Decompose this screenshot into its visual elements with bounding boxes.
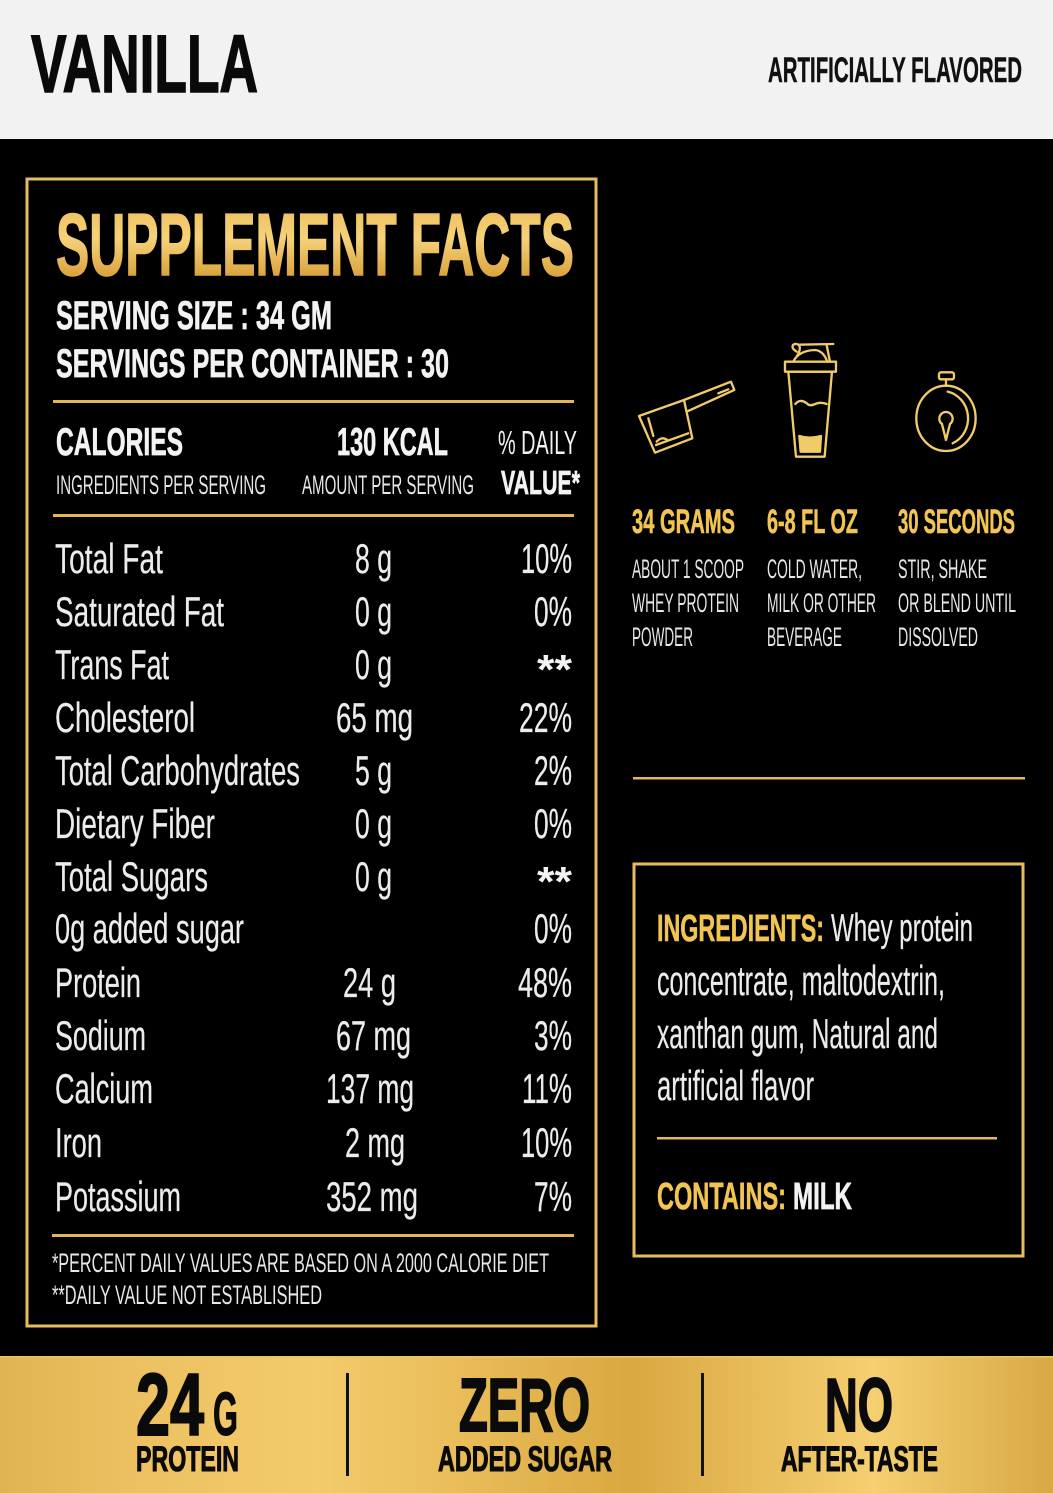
step: liquid amount <box>767 503 876 652</box>
text: serving information: SERVINGS PER CONTAINER : 30 <box>56 342 449 386</box>
footnotes: *PERCENT DAILY VALUES ARE BASED ON A 2000 CALORIE DIET <box>52 1248 549 1278</box>
row: total sugars: 0 g <box>355 853 392 900</box>
row: calcium: Calcium <box>55 1065 153 1112</box>
table header: VALUE* <box>501 464 580 501</box>
step: liquid amount: BEVERAGE <box>767 622 842 652</box>
row: added sugar <box>55 905 572 952</box>
icon: measuring scoop <box>639 382 734 453</box>
row: trans fat: Trans Fat <box>55 641 169 688</box>
claim: zero added sugar: ADDED SUGAR <box>438 1440 612 1479</box>
row: cholesterol: Cholesterol <box>55 694 195 741</box>
row: saturated fat: 0 g <box>355 588 392 635</box>
icon: stopwatch <box>916 372 976 451</box>
text: serving information <box>56 294 449 386</box>
footnotes: **DAILY VALUE NOT ESTABLISHED <box>52 1280 322 1310</box>
step: liquid amount: MILK OR OTHER <box>767 588 876 618</box>
row: sodium: Sodium <box>55 1012 146 1059</box>
row: trans fat: ** <box>537 646 573 693</box>
row: total fat <box>55 535 572 582</box>
step: scoop amount: 34 GRAMS <box>632 503 735 541</box>
row: sodium: 67 mg <box>336 1012 411 1059</box>
row: cholesterol: 22% <box>519 694 572 741</box>
step: liquid amount: COLD WATER, <box>767 554 862 584</box>
step: scoop amount <box>632 503 744 652</box>
row: saturated fat: 0% <box>534 588 572 635</box>
top header band <box>0 0 1053 139</box>
step: mixing time <box>898 503 1016 652</box>
row: dietary fiber <box>55 800 572 847</box>
panel: ingredients <box>634 864 1023 1256</box>
row: potassium: Potassium <box>55 1173 181 1220</box>
heading: supplement facts: SUPPLEMENT FACTS <box>56 195 574 294</box>
row: cholesterol <box>55 694 572 741</box>
row: calcium: 11% <box>522 1065 572 1112</box>
claim: zero added sugar: ZERO <box>459 1363 590 1447</box>
row: total fat: Total Fat <box>55 535 163 582</box>
row: protein: Protein <box>55 959 141 1006</box>
claim: 24g protein: 24 <box>136 1355 204 1454</box>
row: added sugar: 0% <box>534 905 572 952</box>
step: liquid amount: 6-8 FL OZ <box>767 503 858 541</box>
row: iron: Iron <box>55 1119 102 1166</box>
row: potassium: 7% <box>534 1173 572 1220</box>
icon: shaker bottle <box>785 344 836 457</box>
row: protein <box>55 959 572 1006</box>
row: total carbohydrates: 2% <box>534 747 572 794</box>
row: saturated fat: Saturated Fat <box>55 588 224 635</box>
row: total sugars <box>55 853 573 905</box>
table header: 130 KCAL <box>337 421 448 464</box>
row: calcium <box>55 1065 572 1112</box>
table header: AMOUNT PER SERVING <box>302 470 474 500</box>
claim: 24g protein: PROTEIN <box>136 1440 239 1479</box>
row: total carbohydrates: Total Carbohydrates <box>55 747 300 794</box>
row: dietary fiber: 0 g <box>355 800 392 847</box>
row: trans fat <box>55 641 573 693</box>
row: dietary fiber: 0% <box>534 800 572 847</box>
row: trans fat: 0 g <box>355 641 392 688</box>
table header: INGREDIENTS PER SERVING <box>56 470 266 500</box>
step: scoop amount: ABOUT 1 SCOOP <box>632 554 744 584</box>
row: calcium: 137 mg <box>326 1065 414 1112</box>
claim: 24g protein: G <box>213 1380 238 1448</box>
text: ingredients list: artificial flavor <box>657 1062 814 1109</box>
text: ingredients list: INGREDIENTS: <box>657 908 824 950</box>
row: saturated fat <box>55 588 572 635</box>
bottom gold band <box>0 1355 1053 1493</box>
claim: no after-taste <box>781 1363 938 1479</box>
row: protein: 24 g <box>343 959 396 1006</box>
row: total sugars: ** <box>537 858 573 905</box>
row: sodium: 3% <box>534 1012 572 1059</box>
row: iron <box>55 1119 572 1166</box>
table header: % DAILY <box>498 424 577 461</box>
row: iron: 10% <box>521 1119 572 1166</box>
panel: supplement facts <box>27 179 596 1326</box>
claim: zero added sugar <box>438 1363 612 1479</box>
row: total carbohydrates: 5 g <box>355 747 392 794</box>
table header: CALORIES <box>56 421 183 464</box>
row: dietary fiber: Dietary Fiber <box>55 800 215 847</box>
claim: no after-taste: NO <box>825 1363 893 1447</box>
footnotes <box>52 1248 549 1310</box>
claim: no after-taste: AFTER-TASTE <box>781 1440 938 1479</box>
row: cholesterol: 65 mg <box>336 694 413 741</box>
row: protein: 48% <box>518 959 572 1006</box>
row: total fat: 8 g <box>355 535 392 582</box>
step: mixing time: DISSOLVED <box>898 622 978 652</box>
row: iron: 2 mg <box>345 1119 405 1166</box>
row: total fat: 10% <box>521 535 572 582</box>
heading: flavor name: VANILLA <box>31 19 258 110</box>
text: allergen notice: CONTAINS: <box>657 1176 786 1218</box>
text: serving information: SERVING SIZE : 34 GM <box>56 294 332 338</box>
nutrition table rows <box>55 535 573 1220</box>
text: allergen notice: MILK <box>793 1176 852 1218</box>
text: ingredients list <box>657 907 973 1109</box>
row: sodium <box>55 1012 572 1059</box>
row: total sugars: Total Sugars <box>55 853 208 900</box>
step: scoop amount: WHEY PROTEIN <box>632 588 739 618</box>
row: potassium: 352 mg <box>326 1173 418 1220</box>
step: scoop amount: POWDER <box>632 622 693 652</box>
row: potassium <box>55 1173 572 1220</box>
row: added sugar: 0g added sugar <box>55 905 244 952</box>
table header <box>56 421 580 501</box>
